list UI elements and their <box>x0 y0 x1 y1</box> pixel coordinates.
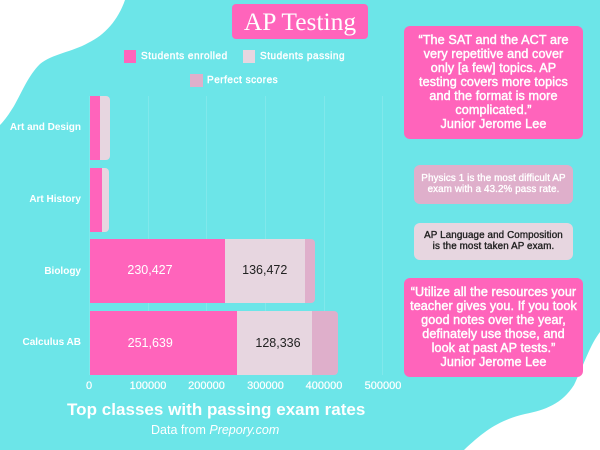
chart title: Top classes with passing exam rates <box>67 400 365 419</box>
fact: Physics 1: exam with a 43.2% pass rate. <box>428 184 559 195</box>
quote: SAT and ACT: Junior Jerome Lee <box>440 117 546 131</box>
quote: SAT and ACT: and the format is more <box>429 89 558 103</box>
bar: Art and Design <box>90 96 110 160</box>
quote: SAT and ACT: “The SAT and the ACT are <box>418 32 569 46</box>
title <box>232 4 368 39</box>
value: 230,427: 230,427 <box>127 263 173 277</box>
x axis labels: 500000 <box>365 380 401 392</box>
quote: Utilize resources: “Utilize all the resources your <box>411 284 576 298</box>
x axis labels <box>86 380 401 392</box>
value: 251,639 <box>90 311 237 375</box>
fact: Physics 1 <box>414 164 573 204</box>
value: 136,472: 136,472 <box>242 263 287 277</box>
x axis labels: 300000 <box>247 380 284 392</box>
legend item: students enrolled: Students enrolled <box>141 50 228 62</box>
quote: Utilize resources: definately use those, and <box>422 327 565 341</box>
category label: Art History: Art History <box>29 194 81 204</box>
quote: Utilize resources: good notes over the year, <box>421 313 566 327</box>
bar: Calculus AB <box>90 311 338 375</box>
legend item: perfect scores: Perfect scores <box>207 75 278 86</box>
value: 128,336 <box>237 311 312 375</box>
category label: Art and Design: Art and Design <box>10 122 81 133</box>
quote: Utilize resources <box>404 278 583 376</box>
quote: Utilize resources: teacher gives you. If you took <box>410 299 577 313</box>
legend item: students passing: Students passing <box>260 50 345 62</box>
x axis labels: 400000 <box>306 380 342 392</box>
legend item: perfect scores <box>190 74 278 87</box>
fact: AP Language: is the most taken AP exam. <box>433 241 554 252</box>
fact: Physics 1: Physics 1 is the most difficult AP <box>421 173 566 184</box>
bar: Biology <box>90 239 315 303</box>
quote: SAT and ACT: very repetitive and cover <box>424 47 563 61</box>
legend <box>124 50 345 87</box>
x axis labels: 200000 <box>188 380 225 392</box>
quote: Utilize resources: look at past AP tests.” <box>432 341 555 355</box>
title: AP Testing <box>244 7 356 36</box>
value: 136,472 <box>224 239 305 303</box>
bar: Art History <box>90 168 109 232</box>
quote: SAT and ACT <box>404 26 583 138</box>
category label: Calculus AB: Calculus AB <box>22 336 81 348</box>
quote: SAT and ACT: complicated.” <box>455 103 532 117</box>
category label: Biology: Biology <box>44 266 81 276</box>
quote: SAT and ACT: testing covers more topics <box>419 75 568 89</box>
value: 251,639: 251,639 <box>128 336 173 350</box>
fact: AP Language <box>414 222 573 260</box>
value: 128,336: 128,336 <box>255 336 301 350</box>
x axis labels: 100000 <box>130 380 166 392</box>
quote: Utilize resources: Junior Jerome Lee <box>440 355 546 369</box>
value: 230,427 <box>90 239 224 303</box>
fact: AP Language: AP Language and Composition <box>424 230 563 241</box>
quote: SAT and ACT: only [a few] topics. AP <box>431 61 556 75</box>
chart source: Data from Prepory.com <box>151 423 279 437</box>
x axis labels: 0 <box>86 380 92 392</box>
